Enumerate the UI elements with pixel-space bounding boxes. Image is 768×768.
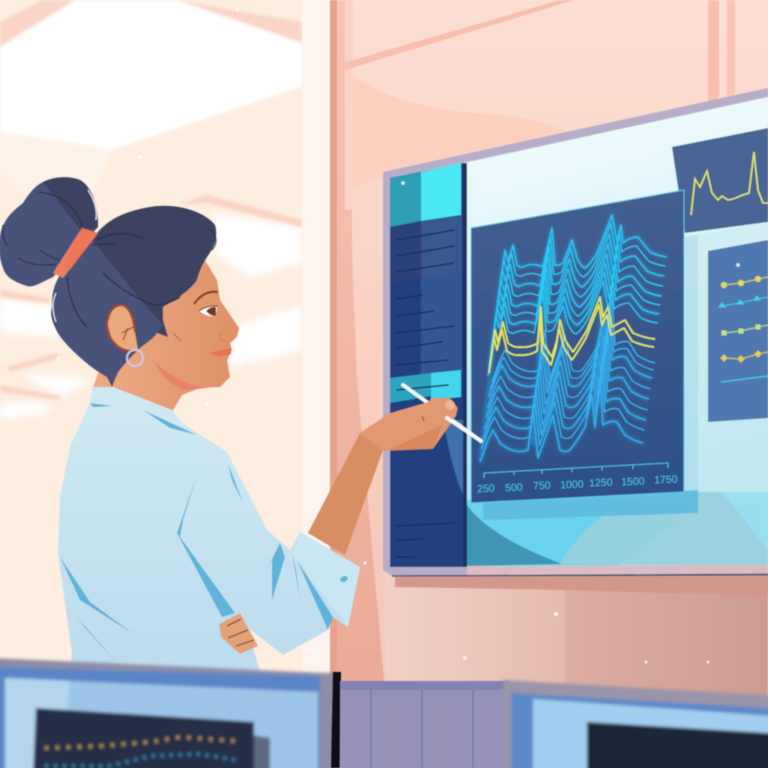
ear [107,305,138,351]
chart x axis labels: 750 [533,480,551,492]
stacked spectra: upper lines [488,215,667,376]
chart x axis labels: 1000 [560,478,584,492]
foreground purple panel [340,681,510,768]
foreground monitor right [503,680,768,768]
foreground monitor left [0,657,335,768]
eye [199,306,218,319]
sidebar divider [463,163,467,567]
chart x axis labels: 1500 [621,475,645,489]
display frame [383,88,768,576]
dark gap beside left monitor [331,672,341,768]
main screen area [463,97,768,566]
left monitor dark chart card [32,708,270,768]
chart x axis labels [477,473,678,495]
cuff button [339,575,349,583]
stacked spectra glow [480,215,667,462]
shirt folds [60,403,333,663]
pillar between window and wall [302,0,332,680]
series: green squares [722,325,768,335]
chart x axis labels: 1250 [589,476,613,490]
person [0,177,481,672]
chart x axis labels: 500 [505,482,523,494]
series: cyan triangles [719,296,768,307]
hand [360,398,481,451]
background: window with pale light [0,0,304,768]
lips [208,348,231,357]
series: yellow diamonds [721,351,768,362]
right monitor dark card [587,722,768,768]
sidebar text lines [397,230,454,557]
series panel [708,240,768,422]
stacked spectra: lower lines [480,295,655,462]
highlighted yellow spectra [489,297,655,373]
main hair [51,206,216,387]
neck and face [92,257,239,412]
eyebrow [194,292,218,304]
earring [127,350,143,366]
hair bun [0,177,98,286]
floating particles [56,8,740,663]
pen [403,385,481,441]
sidebar teal header [390,163,461,227]
chart x axis labels: 1750 [654,473,678,487]
fingers [219,613,258,654]
light card backing [685,222,768,492]
wall [330,0,768,768]
window ceiling light [0,0,302,150]
chart x axis [484,463,668,478]
wall display [383,88,768,576]
sidebar highlighted row [390,370,461,403]
series: yellow circles [721,276,768,288]
spectra chart panel [471,190,684,503]
chart shadow card [483,490,698,520]
monitor shadow on wall [395,574,768,596]
forearm [308,433,383,555]
shirt [58,387,360,672]
sidebar [390,163,464,567]
top right spectrum card [672,128,768,233]
series: cyan line [721,376,768,382]
hair tie [53,228,98,278]
sidebar dark block [390,215,461,283]
chart x axis labels: 250 [477,483,495,495]
